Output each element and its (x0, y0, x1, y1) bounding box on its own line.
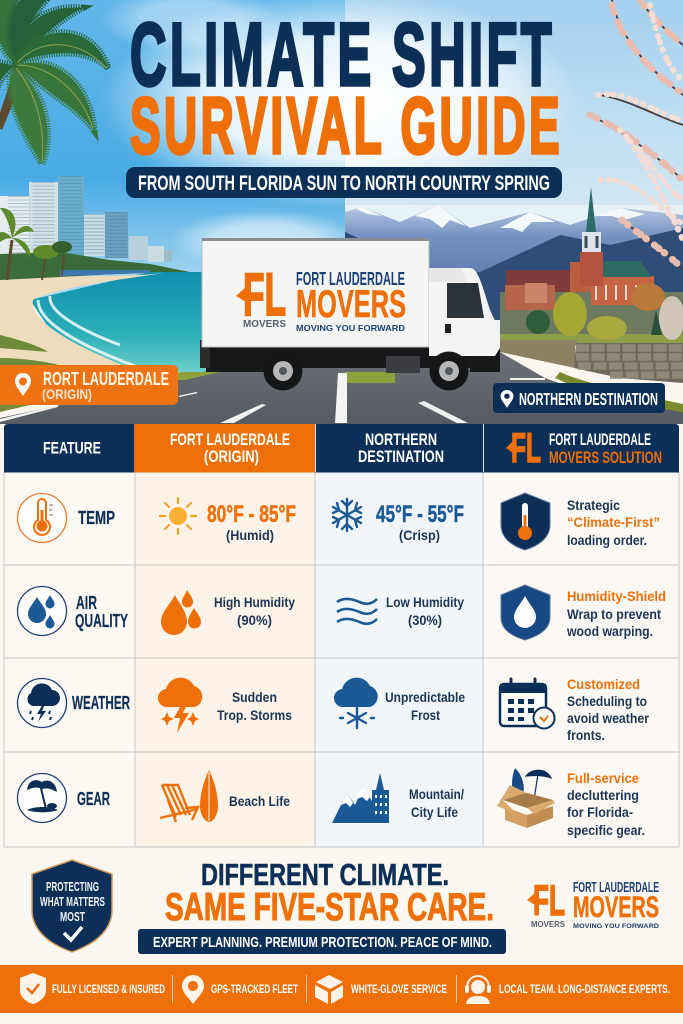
tree line (0, 252, 190, 280)
sea (30, 272, 345, 372)
solution text: Wrap to prevent (567, 607, 661, 622)
trust item: white-glove service (315, 975, 447, 1004)
origin weather: Sudden (232, 690, 277, 705)
row: temp: TEMP (78, 508, 115, 528)
truck logo: FL (243, 261, 286, 328)
company logo (527, 877, 659, 930)
solution text: specific gear. (567, 823, 645, 838)
tagline pill (138, 929, 506, 954)
icon: sun (160, 498, 196, 534)
solution text: fronts. (567, 728, 605, 743)
origin temperature: 80°F - 85°F (207, 501, 296, 528)
origin weather: Trop. Storms (217, 708, 292, 723)
solution text (567, 498, 660, 548)
solution text: loading order. (567, 533, 647, 548)
icon: shield with thermometer (501, 493, 550, 550)
trust item: licensed and insured (20, 973, 165, 1004)
icon: air waves (337, 599, 377, 624)
scene: Florida beach and high-rises (0, 176, 345, 372)
company logo: FL (533, 877, 565, 925)
trust item: white-glove service: WHITE-GLOVE SERVICE (351, 984, 447, 996)
shield badge: protecting what matters most: MOST (60, 910, 85, 924)
stone wall (500, 340, 578, 368)
header: northern destination (358, 430, 444, 466)
solution text: “Climate-First” (567, 515, 660, 530)
solution text: for Florida- (567, 805, 633, 820)
shield badge: protecting what matters most (32, 860, 112, 952)
road (0, 352, 683, 424)
blossom branches (590, 0, 683, 270)
icon: location pin (15, 373, 31, 396)
row: gear (18, 768, 645, 838)
row: temp (18, 493, 660, 550)
header: northern destination: DESTINATION (358, 447, 444, 466)
trust item: licensed and insured: FULLY LICENSED & INSURED (52, 984, 165, 996)
company logo: MOVING YOU FORWARD (573, 923, 659, 930)
palm tree top-left (0, 0, 108, 164)
subtitle pill (126, 167, 562, 198)
origin humidity: (90%) (237, 613, 272, 628)
snowy mountain range (345, 205, 683, 310)
solution text: wood warping. (566, 624, 653, 639)
green ground (500, 334, 683, 346)
icon: moving box with surfboard and umbrella (497, 768, 555, 828)
comparison table (4, 424, 679, 847)
label: air quality: QUALITY (75, 611, 128, 631)
table column fills (4, 472, 679, 847)
icon: orange drops (161, 590, 201, 635)
icon: calendar with check (500, 679, 554, 728)
icon: snow cloud (334, 678, 378, 728)
solution text: avoid weather (567, 711, 650, 726)
origin weather (217, 690, 292, 723)
closing headline (165, 858, 494, 929)
chassis (206, 347, 500, 372)
header: feature: FEATURE (43, 438, 101, 458)
header: FL movers solution (506, 424, 662, 471)
header: Fort Lauderdale origin: (ORIGIN) (204, 447, 259, 466)
header: FL movers solution: FL (511, 424, 541, 471)
destination humidity: (30%) (408, 613, 442, 628)
bottom trust band (0, 965, 683, 1013)
badge: Fort Lauderdale origin (0, 365, 178, 405)
truck logo: MOVING YOU FORWARD (296, 323, 405, 333)
icon: orange storm (158, 678, 202, 733)
origin humidity (214, 595, 295, 628)
solution text: Full-service (567, 771, 639, 786)
destination weather: Unpredictable (385, 690, 465, 705)
destination humidity: Low Humidity (386, 595, 464, 610)
origin temperature (207, 501, 296, 543)
label: air quality: AIR (76, 593, 97, 613)
town buildings (505, 187, 654, 310)
icon: humidity shield (501, 585, 550, 640)
destination temperature: 45°F - 55°F (376, 501, 464, 528)
origin temperature: (Humid) (226, 528, 274, 543)
row: weather (18, 677, 650, 743)
destination weather (385, 690, 465, 723)
trust item: GPS fleet: GPS-TRACKED FLEET (211, 984, 298, 996)
header: Fort Lauderdale origin (170, 430, 290, 466)
row: gear: GEAR (77, 789, 110, 809)
label: air quality (75, 593, 128, 631)
row: gear: Beach Life (229, 794, 290, 809)
row: weather: WEATHER (72, 693, 130, 713)
icon: beach umbrella (18, 774, 66, 822)
dark foreground ridge (345, 228, 683, 320)
closing headline: DIFFERENT CLIMATE. (201, 858, 449, 892)
icon: thermometer (18, 494, 66, 542)
solution text (567, 677, 650, 743)
solution text: Scheduling to (567, 694, 647, 709)
icon: snowflake (333, 499, 361, 531)
trust item: local team (465, 976, 670, 1004)
autumn and spring trees (526, 283, 683, 340)
header: Fort Lauderdale origin: FORT LAUDERDALE (170, 430, 290, 449)
badge: Fort Lauderdale origin: RORT LAUDERDALE (43, 369, 169, 389)
row: air quality (18, 585, 666, 640)
solution text: Humidity-Shield (567, 589, 666, 604)
icon: beach chair and surfboard (160, 770, 218, 822)
truck logo: MOVERS (243, 319, 286, 330)
solution text: Customized (567, 677, 640, 692)
icon: storm cloud (18, 678, 66, 728)
moving truck (200, 238, 500, 390)
cargo box (202, 239, 429, 347)
high-rise buildings (0, 176, 172, 262)
beach sand (0, 273, 165, 372)
destination temperature: (Crisp) (399, 528, 440, 543)
destination lifestyle (409, 787, 464, 820)
badge: Fort Lauderdale origin: (ORIGIN) (42, 386, 92, 402)
origin humidity: High Humidity (214, 595, 295, 610)
truck logo: MOVERS (296, 283, 406, 326)
tagline pill: EXPERT PLANNING. PREMIUM PROTECTION. PEACE OF MIND. (153, 935, 492, 951)
table header row (4, 424, 679, 472)
shield badge: protecting what matters most: PROTECTING (46, 880, 99, 894)
closing headline: SAME FIVE-STAR CARE. (165, 886, 494, 929)
destination lifestyle: City Life (411, 805, 458, 820)
icon: check mark (64, 927, 82, 940)
town ground (500, 292, 683, 336)
solution text: Strategic (567, 498, 620, 513)
small palm (0, 208, 72, 280)
destination humidity (386, 595, 464, 628)
solution text (566, 589, 666, 639)
header: northern destination: NORTHERN (365, 430, 437, 449)
shield badge: protecting what matters most: WHAT MATTERS (40, 895, 105, 909)
title (130, 4, 563, 170)
destination weather: Frost (411, 708, 440, 723)
solution text (567, 771, 645, 838)
destination lifestyle: Mountain/ (409, 787, 464, 802)
truck logo (236, 261, 406, 333)
badge: northern destination (493, 383, 665, 413)
truck logo: FORT LAUDERDALE (296, 269, 405, 289)
icon: water drops (18, 586, 66, 636)
destination temperature (376, 501, 464, 543)
surf line (38, 296, 140, 368)
company logo: MOVERS (531, 919, 565, 929)
cab (429, 268, 500, 356)
icon: location pin (500, 390, 514, 408)
scene: northern mountains and town (345, 187, 683, 383)
wheels (264, 352, 468, 390)
solution text: decluttering (567, 788, 639, 803)
beach grass (0, 335, 58, 368)
icon: mountains and city (332, 773, 389, 823)
trust item: GPS fleet (182, 975, 298, 1004)
